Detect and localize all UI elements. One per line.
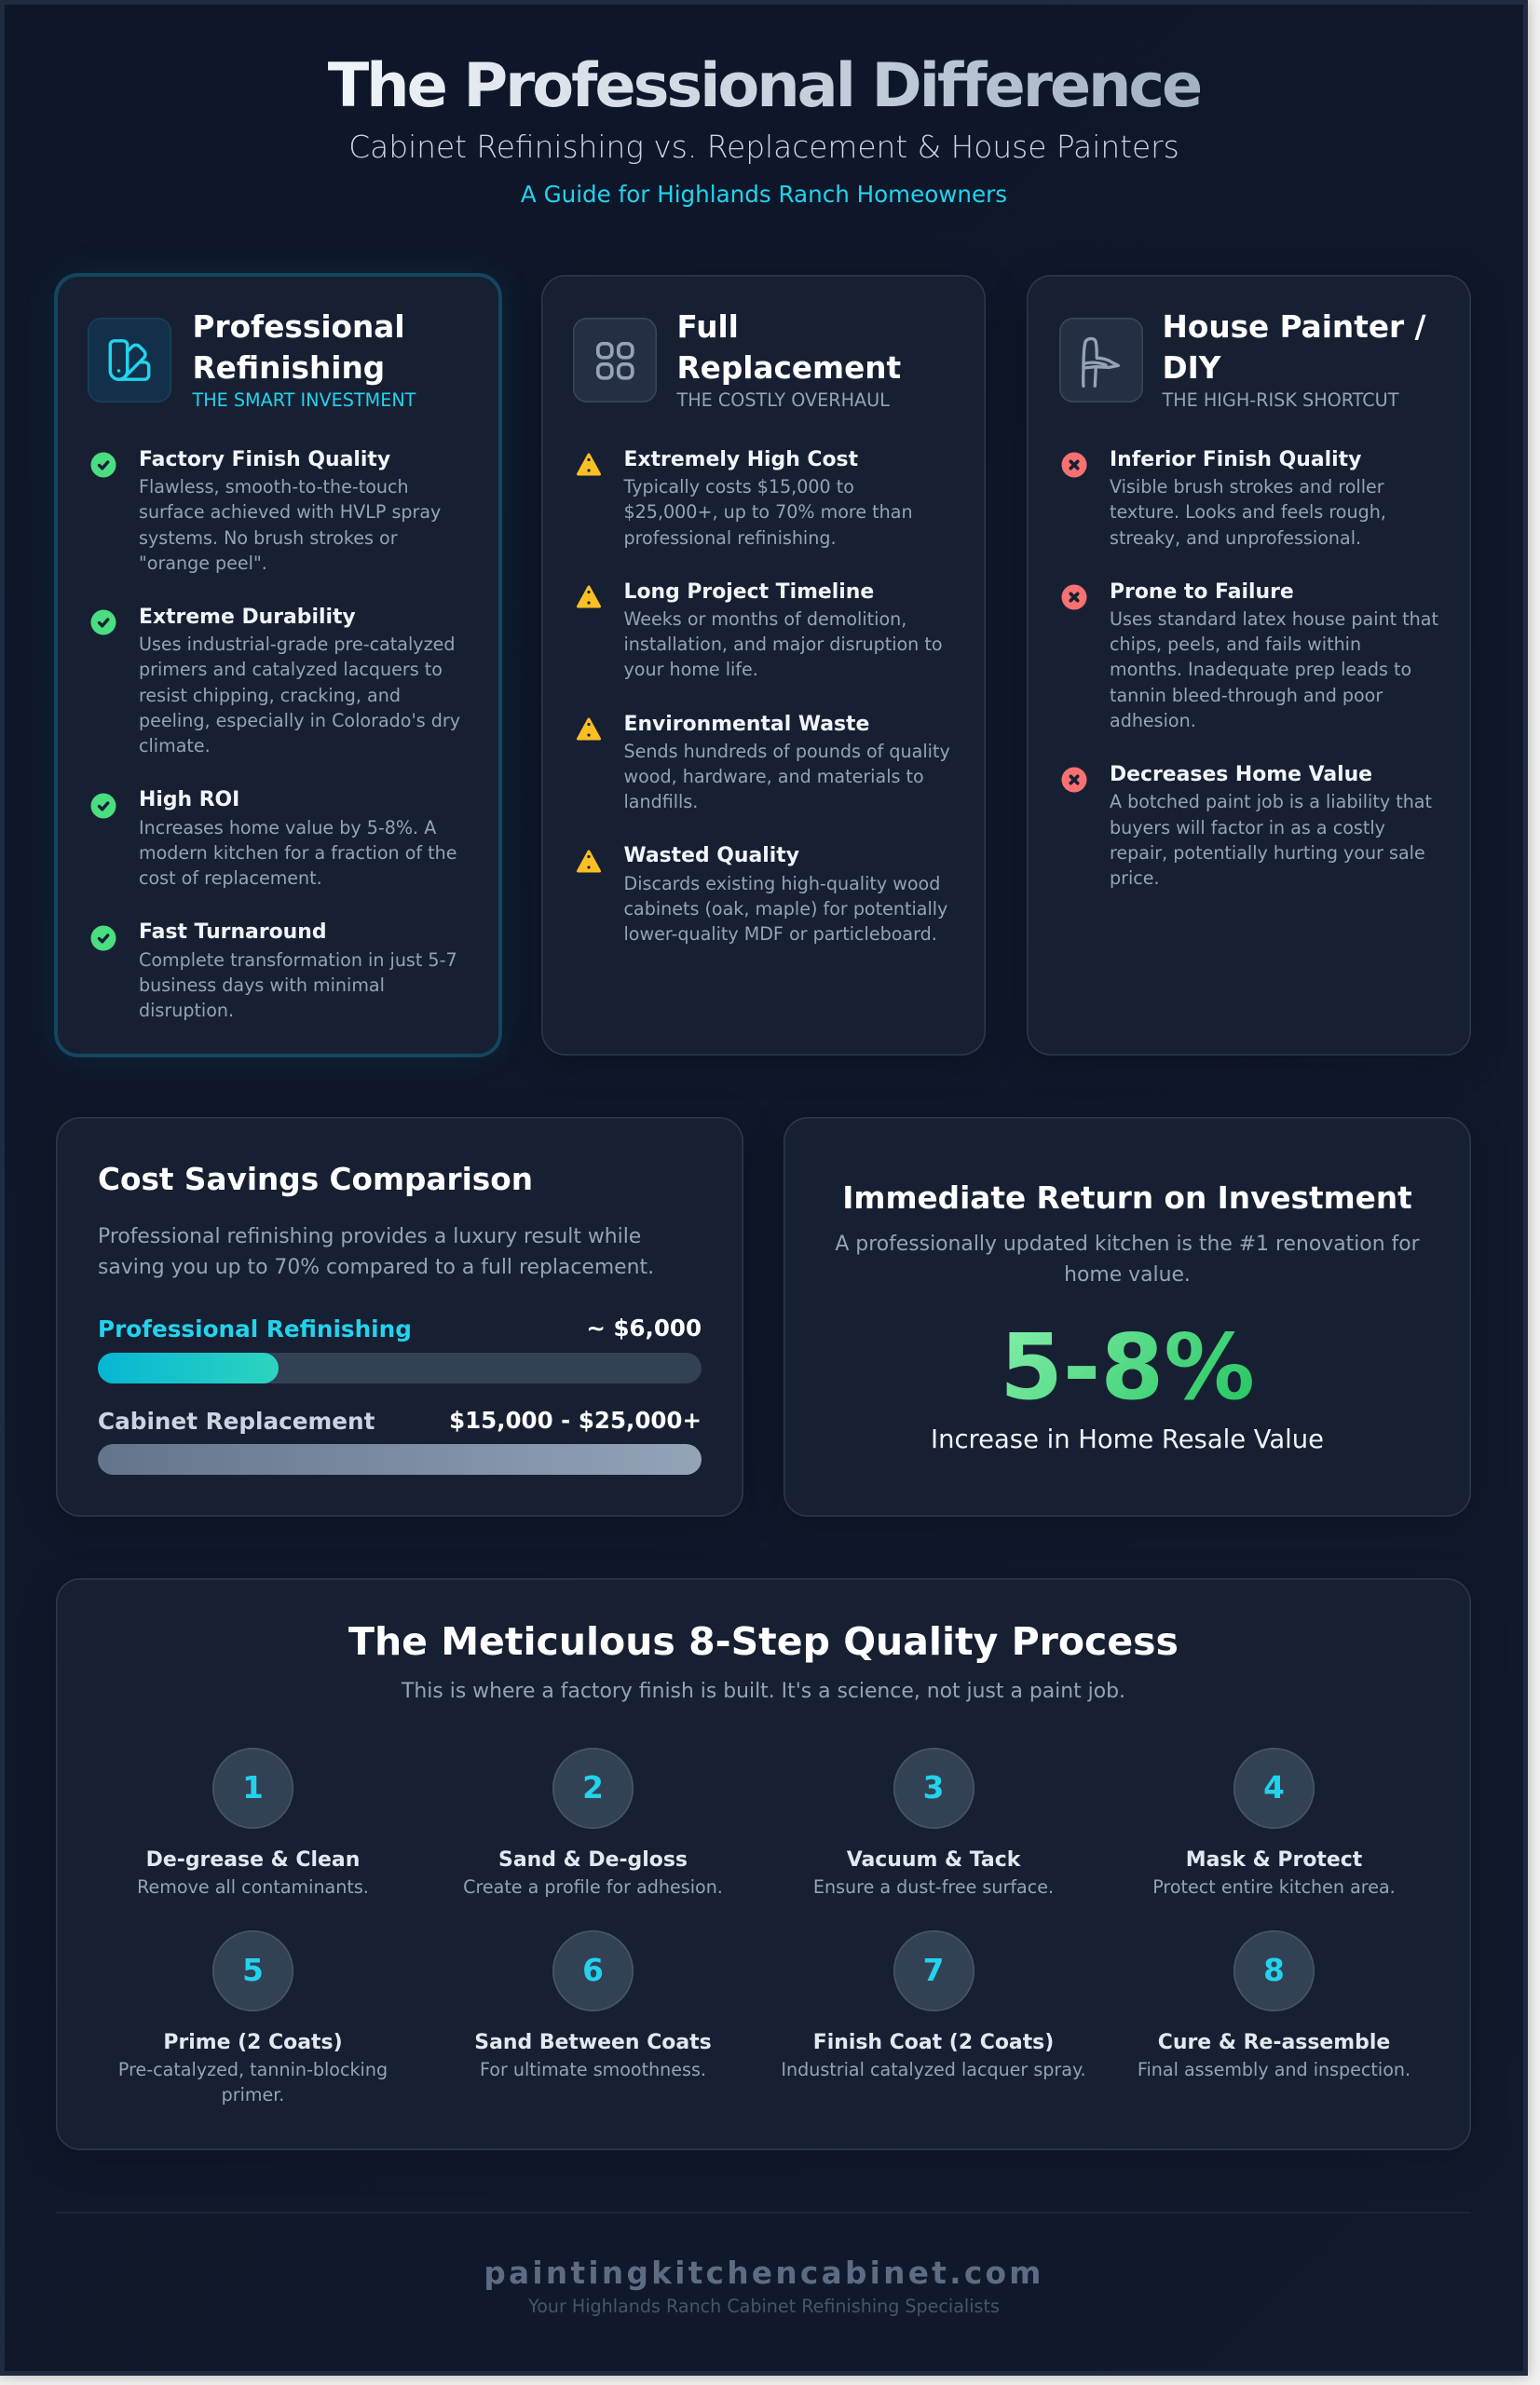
panel: return on investment	[784, 1117, 1471, 1517]
drawback: timeline	[576, 580, 943, 680]
list: risks	[1062, 448, 1438, 889]
step 7: Industrial catalyzed lacquer spray.	[781, 2059, 1086, 2079]
step 1: De-grease & Clean	[146, 1848, 360, 1872]
drawback: waste: Environmental Waste	[624, 713, 869, 736]
bar label: replacement: Cabinet Replacement	[98, 1407, 375, 1435]
drawback: waste	[576, 713, 950, 812]
risk: failure: Uses standard latex house paint that	[1110, 608, 1438, 630]
benefit: durability: primers and catalyzed lacquers to	[139, 659, 443, 680]
step 2: Sand & De-gloss	[498, 1848, 688, 1872]
step 6: 6	[582, 1953, 604, 1988]
stat caption: Increase in Home Resale Value	[931, 1425, 1324, 1454]
step 5: Prime (2 Coats)	[163, 2031, 343, 2054]
step 6: Sand Between Coats	[474, 2031, 712, 2054]
drawback: quality: Wasted Quality	[624, 844, 799, 867]
card heading	[676, 309, 901, 386]
benefit: durability: resist chipping, cracking, and	[139, 685, 401, 706]
card heading	[192, 309, 405, 386]
step 3: Ensure a dust-free surface.	[813, 1876, 1054, 1897]
benefit: durability: peeling, especially in Colorado's dry	[139, 710, 460, 731]
risk: home value: A botched paint job is a liability that	[1110, 791, 1432, 812]
panel description: This is where a factory finish is built. It's a science, not just a paint job.	[402, 1680, 1125, 1703]
risk: finish: texture. Looks and feels rough,	[1110, 501, 1386, 523]
card subheading: THE HIGH-RISK SHORTCUT	[1163, 389, 1398, 411]
benefit: turnaround: business days with minimal	[139, 974, 385, 996]
bar: replacement cost	[98, 1444, 702, 1475]
panel description: Professional refinishing provides a luxury result while	[98, 1225, 641, 1248]
list: benefits	[91, 448, 460, 1021]
panel heading: Cost Savings Comparison	[98, 1162, 533, 1197]
drawback: cost: Extremely High Cost	[624, 448, 858, 471]
risk: failure: adhesion.	[1110, 710, 1196, 731]
risk: home value: repair, potentially hurting your sale	[1110, 842, 1425, 864]
panel: 8-step process	[56, 1578, 1471, 2150]
panel: house painter / DIY	[1027, 275, 1471, 1056]
benefit: durability: Uses industrial-grade pre-catalyzed	[139, 634, 455, 655]
panel heading: Immediate Return on Investment	[842, 1180, 1412, 1216]
risk: home value: Decreases Home Value	[1110, 763, 1372, 786]
icon: grid of cabinets	[573, 318, 657, 402]
drawback: cost: professional refinishing.	[624, 527, 837, 549]
step 8	[1138, 1930, 1411, 2079]
drawback: cost: $25,000+, up to 70% more than	[624, 501, 913, 523]
step 4: Mask & Protect	[1186, 1848, 1362, 1872]
footer tagline: Your Highlands Ranch Cabinet Refinishing Specialists	[528, 2296, 1000, 2317]
step 5: 5	[242, 1953, 264, 1988]
drawback: quality: cabinets (oak, maple) for potentially	[624, 898, 947, 920]
benefit: durability: climate.	[139, 735, 211, 756]
benefit: durability	[91, 606, 460, 756]
benefit: ROI: High ROI	[139, 788, 239, 811]
drawback: timeline: Long Project Timeline	[624, 580, 874, 604]
panel: professional refinishing	[54, 273, 502, 1057]
step 8: Final assembly and inspection.	[1138, 2059, 1411, 2079]
risk: finish: Inferior Finish Quality	[1110, 448, 1361, 471]
drawback: timeline: your home life.	[624, 659, 758, 680]
audience tagline: A Guide for Highlands Ranch Homeowners	[521, 181, 1007, 208]
panel description: saving you up to 70% compared to a full replacement.	[98, 1256, 654, 1279]
step 6: For ultimate smoothness.	[480, 2059, 706, 2079]
list: drawbacks	[576, 448, 950, 945]
step 8: Cure & Re-assemble	[1158, 2031, 1390, 2054]
benefit: factory finish: Flawless, smooth-to-the-touch	[139, 476, 409, 497]
panel description	[835, 1233, 1420, 1287]
benefit: factory finish: surface achieved with HVLP spray	[139, 501, 441, 523]
benefit: ROI: cost of replacement.	[139, 867, 322, 889]
bar: refinishing cost	[98, 1353, 702, 1383]
step 3: 3	[923, 1770, 944, 1806]
step 3: Vacuum & Tack	[847, 1848, 1020, 1872]
drawback: quality: Discards existing high-quality wood	[624, 873, 940, 894]
benefit: ROI: modern kitchen for a fraction of the	[139, 842, 457, 864]
risk: finish: streaky, and unprofessional.	[1110, 527, 1361, 549]
footer domain: paintingkitchencabinet.com	[484, 2256, 1044, 2291]
icon: paint roller sketch	[1059, 318, 1143, 402]
benefit: durability: Extreme Durability	[139, 606, 356, 629]
benefit: ROI: Increases home value by 5-8%. A	[139, 817, 436, 838]
step 5: Pre-catalyzed, tannin-blocking	[118, 2059, 388, 2079]
step 7: Finish Coat (2 Coats)	[813, 2031, 1054, 2054]
card subheading: THE SMART INVESTMENT	[192, 389, 416, 411]
card heading: DIY	[1163, 350, 1220, 386]
drawback: cost: Typically costs $15,000 to	[624, 476, 854, 497]
benefit: turnaround: Fast Turnaround	[139, 920, 326, 944]
step 1	[137, 1748, 369, 1897]
step 2	[463, 1748, 723, 1897]
card heading: Full	[676, 309, 739, 345]
panel description	[98, 1225, 654, 1279]
risk: home value: buyers will factor in as a costly	[1110, 817, 1385, 838]
benefit: ROI	[91, 788, 457, 889]
risk: failure: tannin bleed-through and poor	[1110, 685, 1383, 706]
card subheading: THE COSTLY OVERHAUL	[676, 389, 890, 411]
benefit: factory finish	[91, 448, 441, 574]
step 1: 1	[242, 1770, 264, 1806]
benefit: turnaround: disruption.	[139, 1000, 234, 1021]
step 7	[781, 1930, 1086, 2079]
card heading: Refinishing	[192, 350, 385, 386]
bar label: refinishing: Professional Refinishing	[98, 1315, 412, 1342]
risk: failure: months. Inadequate prep leads to	[1110, 659, 1411, 680]
title: The Professional Difference	[328, 50, 1200, 121]
panel heading: The Meticulous 8-Step Quality Process	[348, 1619, 1179, 1664]
risk: failure	[1062, 580, 1438, 731]
icon: swatch book	[88, 318, 171, 402]
step 2: Create a profile for adhesion.	[463, 1876, 723, 1897]
panel: full replacement	[541, 275, 986, 1056]
drawback: waste: Sends hundreds of pounds of quality	[624, 741, 950, 762]
benefit: factory finish: systems. No brush strokes or	[139, 527, 398, 549]
risk: finish: Visible brush strokes and roller	[1110, 476, 1384, 497]
drawback: waste: wood, hardware, and materials to	[624, 766, 924, 787]
step 6	[474, 1930, 712, 2079]
drawback: timeline: installation, and major disruption to	[624, 634, 943, 655]
bar value: replacement: $15,000 - $25,000+	[449, 1407, 702, 1434]
drawback: cost	[576, 448, 913, 549]
risk: failure: chips, peels, and fails within	[1110, 634, 1361, 655]
benefit: factory finish: "orange peel".	[139, 552, 267, 574]
step 7: 7	[923, 1953, 944, 1988]
risk: home value	[1062, 763, 1432, 889]
bar value: refinishing: ~ $6,000	[586, 1315, 702, 1342]
drawback: quality	[576, 844, 947, 945]
card heading: Replacement	[676, 350, 901, 386]
benefit: turnaround: Complete transformation in just 5-7	[139, 949, 457, 971]
big stat: 5-8%	[1000, 1314, 1255, 1420]
panel description: A professionally updated kitchen is the #1 renovation for	[835, 1233, 1420, 1256]
step 5	[118, 1930, 388, 2106]
step 1: Remove all contaminants.	[137, 1876, 369, 1897]
drawback: timeline: Weeks or months of demolition,	[624, 608, 906, 630]
benefit: factory finish: Factory Finish Quality	[139, 448, 390, 471]
panel description: home value.	[1064, 1263, 1191, 1287]
benefit: turnaround	[91, 920, 457, 1021]
step 3	[813, 1748, 1054, 1897]
step 2: 2	[582, 1770, 604, 1806]
risk: finish	[1062, 448, 1386, 549]
step 4: Protect entire kitchen area.	[1152, 1876, 1396, 1897]
panel: cost savings	[56, 1117, 743, 1517]
step 5: primer.	[222, 2084, 284, 2106]
step 4	[1152, 1748, 1396, 1897]
risk: home value: price.	[1110, 867, 1160, 889]
card heading: Professional	[192, 309, 405, 345]
card heading: House Painter /	[1163, 309, 1425, 345]
step 4: 4	[1263, 1770, 1285, 1806]
card heading	[1163, 309, 1425, 386]
subtitle: Cabinet Refinishing vs. Replacement & House Painters	[348, 129, 1179, 165]
drawback: waste: landfills.	[624, 791, 698, 812]
step 8: 8	[1263, 1953, 1285, 1988]
risk: failure: Prone to Failure	[1110, 580, 1294, 604]
drawback: quality: lower-quality MDF or particleboard.	[624, 923, 937, 945]
